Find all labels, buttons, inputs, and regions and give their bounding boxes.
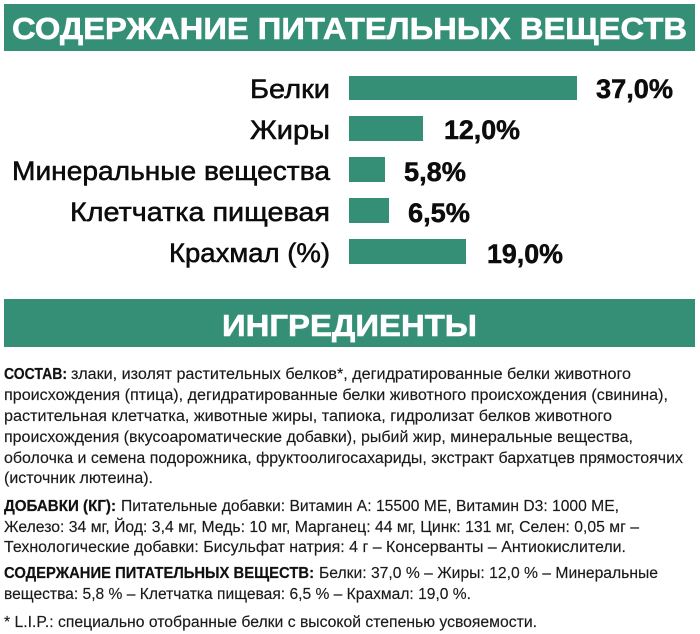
text block: nutrient content summary: вещества: 5,8 % – Клетчатка пищевая: 6,5 % – Крахмал: 19,0 %. (4, 586, 471, 603)
text block: composition: СОСТАВ: (4, 366, 67, 383)
title: nutrient content: СОДЕРЖАНИЕ ПИТАТЕЛЬНЫХ ВЕЩЕСТВ (12, 11, 687, 46)
row: protein: 37,0% (596, 74, 673, 104)
row: protein (250, 74, 673, 104)
text block: composition: происхождения (вкусоароматические добавки), рыбий жир, минеральные вещества, (4, 429, 633, 446)
text block: composition: (источник лютеина). (4, 470, 153, 487)
text block: nutrient content summary: СОДЕРЖАНИЕ ПИТАТЕЛЬНЫХ ВЕЩЕСТВ: (4, 565, 314, 582)
text block: additives (4, 498, 639, 556)
row: fats: 12,0% (444, 115, 520, 145)
text block: additives: Питательные добавки: Витамин А: 15500 МЕ, Витамин D3: 1000 МЕ, (121, 498, 619, 515)
row: dietary fibre: Клетчатка пищевая (70, 197, 330, 227)
row: minerals: Минеральные вещества (12, 156, 331, 186)
text block: composition: происхождения (птица), дегидратированные белки животного происхождения (свинина), (4, 387, 668, 404)
title: ingredients: ИНГРЕДИЕНТЫ (222, 308, 477, 343)
text block: composition (4, 366, 683, 487)
text block: nutrient content summary (4, 565, 658, 603)
text block: additives: Железо: 34 мг, Йод: 3,4 мг, Медь: 10 мг, Марганец: 44 мг, Цинк: 131 мг, Селен: 0,05 мг – (4, 518, 639, 536)
row: protein: Белки (250, 74, 330, 104)
text block: additives: ДОБАВКИ (КГ): (4, 498, 116, 515)
text block: nutrient content summary: Белки: 37,0 % – Жиры: 12,0 % – Минеральные (319, 565, 658, 582)
text block: composition: оболочка и семена подорожника, фруктоолигосахариды, экстракт бархатцев прямостоячих (4, 450, 683, 467)
row: starch (169, 238, 563, 269)
row: fats (250, 115, 520, 145)
row: dietary fibre (70, 197, 470, 228)
text block: composition: растительная клетчатка, животные жиры, тапиока, гидролизат белков животного (4, 408, 612, 425)
text block: additives: Технологические добавки: Бисульфат натрия: 4 г – Консерванты – Антиокислители. (4, 539, 626, 556)
row: starch: Крахмал (%) (169, 238, 330, 268)
row: dietary fibre: 6,5% (408, 198, 470, 228)
row: fats: Жиры (250, 115, 330, 145)
row: starch: 19,0% (487, 239, 563, 269)
panel: nutrient content header (4, 4, 695, 51)
panel: ingredients header (4, 299, 695, 347)
row: minerals (12, 156, 466, 187)
footnote: * L.I.P.: специально отобранные белки с высокой степенью усвояемости. (4, 614, 537, 631)
bar chart: nutrient percentages (12, 74, 673, 269)
row: minerals: 5,8% (404, 157, 466, 187)
text block: composition: злаки, изолят растительных белков*, дегидратированные белки животного (71, 366, 631, 383)
